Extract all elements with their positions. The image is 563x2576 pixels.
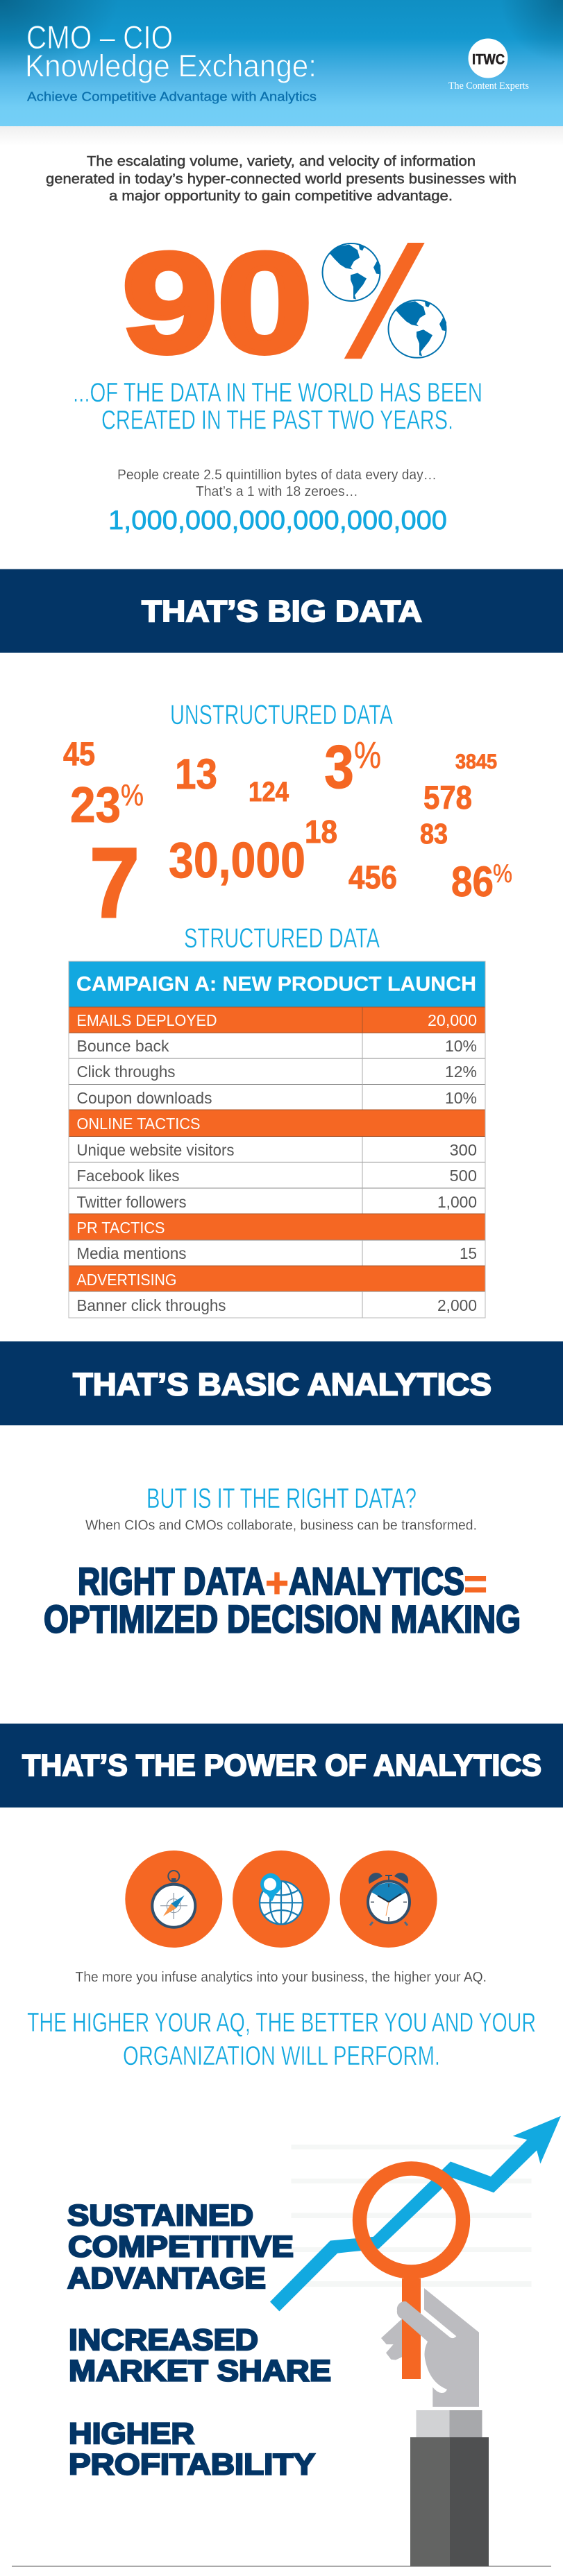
icon: compass: [125, 1851, 222, 1948]
scattered numbers: %: [493, 859, 512, 888]
row: bounce back: [76, 1037, 477, 1055]
band: that's big data: [0, 569, 563, 653]
equation: [44, 1559, 521, 1641]
intro paragraph: a major opportunity to gain competitive advantage.: [109, 189, 453, 204]
table: campaign A: [69, 961, 485, 1318]
quintillion text: [117, 467, 437, 499]
scattered numbers: 23: [70, 778, 121, 833]
row: unique website visitors: 300: [450, 1141, 477, 1159]
title: Knowledge Exchange:: [25, 49, 317, 83]
benefit: increased market share: INCREASED: [69, 2324, 258, 2357]
scattered numbers: 86: [451, 858, 494, 905]
row: media mentions: [76, 1244, 477, 1262]
plus sign: +: [265, 1560, 289, 1606]
row: bounce back: 10%: [445, 1037, 477, 1055]
benefit: sustained competitive advantage: COMPETITIVE: [68, 2231, 294, 2264]
benefit: higher profitability: HIGHER: [69, 2417, 194, 2450]
row: facebook likes: [76, 1167, 477, 1185]
large number: 1,000,000,000,000,000,000: [108, 506, 447, 535]
equation: RIGHT DATA: [78, 1559, 265, 1603]
row: emails deployed: EMAILS DEPLOYED: [76, 1011, 217, 1029]
stat number: 90: [122, 224, 312, 382]
rising arrow: [270, 2116, 561, 2311]
heading: unstructured data: UNSTRUCTURED DATA: [170, 700, 393, 730]
title: CMO – CIO: [26, 19, 173, 55]
row: click throughs: 12%: [445, 1063, 477, 1081]
band: that's basic analytics: [0, 1341, 563, 1425]
scattered numbers: %: [354, 735, 381, 776]
heading: but is it the right data: BUT IS IT THE RIGHT DATA?: [146, 1482, 417, 1514]
scattered numbers: 578: [423, 779, 472, 816]
row: media mentions: 15: [460, 1244, 477, 1262]
row: banner click throughs: [76, 1296, 477, 1314]
row: facebook likes: Facebook likes: [76, 1167, 179, 1185]
subtitle: Achieve Competitive Advantage with Analytics: [27, 89, 317, 104]
scattered numbers: 13: [175, 750, 217, 798]
row: online tactics: ONLINE TACTICS: [76, 1115, 200, 1133]
row: unique website visitors: Unique website visitors: [76, 1141, 235, 1159]
scattered numbers: 456: [348, 859, 397, 895]
benefit: higher profitability: [69, 2417, 315, 2482]
magnifier: [360, 2168, 463, 2379]
benefit: sustained competitive advantage: SUSTAINED: [67, 2199, 253, 2232]
table title: CAMPAIGN A: NEW PRODUCT LAUNCH: [76, 972, 476, 996]
row: coupon downloads: Coupon downloads: [76, 1089, 212, 1107]
row: unique website visitors: [76, 1141, 477, 1159]
AQ headline: [27, 2008, 536, 2071]
shirt cuff: [417, 2410, 482, 2437]
row: bounce back: Bounce back: [76, 1037, 169, 1055]
row: banner click throughs: Banner click throughs: [76, 1296, 226, 1314]
scattered numbers: 3845: [455, 750, 497, 773]
icon: globe with pin: [233, 1851, 330, 1948]
ground line: [12, 2566, 551, 2567]
intro paragraph: The escalating volume, variety, and velocity of information: [87, 154, 476, 169]
stat caption: CREATED IN THE PAST TWO YEARS.: [101, 405, 453, 436]
band: that's the power of analytics: THAT’S THE POWER OF ANALYTICS: [22, 1749, 541, 1783]
row: twitter followers: [76, 1193, 477, 1211]
row: twitter followers: Twitter followers: [76, 1193, 186, 1211]
logo: ITWC: ITWC: [472, 51, 505, 67]
percent slash: [344, 243, 425, 359]
scattered numbers: 30,000: [169, 833, 305, 888]
benefit: sustained competitive advantage: [67, 2199, 294, 2295]
intro paragraph: generated in today’s hyper-connected world presents businesses with: [46, 171, 516, 187]
row: click throughs: [76, 1063, 477, 1081]
quintillion text: That’s a 1 with 18 zeroes…: [196, 484, 358, 499]
row: facebook likes: 500: [450, 1167, 477, 1185]
scattered numbers: 18: [305, 814, 337, 850]
icon: upper globe: [322, 243, 380, 301]
equation: ANALYTICS: [289, 1559, 464, 1603]
scattered numbers: 45: [63, 735, 95, 772]
chart grid bars: [292, 2145, 532, 2287]
row: emails deployed: 20,000: [428, 1011, 477, 1029]
benefit: increased market share: [69, 2324, 331, 2387]
stat caption: [73, 378, 482, 436]
heading: structured data: STRUCTURED DATA: [184, 923, 380, 954]
icon: lower globe: [389, 300, 446, 358]
logo: ITWC: The Content Experts: [448, 80, 529, 92]
band: that's the power of analytics: [0, 1724, 563, 1808]
table title: [69, 961, 485, 1007]
illustration: hand holding magnifier: [12, 2168, 551, 2567]
scattered numbers: 124: [249, 777, 289, 807]
row fills: [69, 1007, 485, 1291]
benefit: sustained competitive advantage: ADVANTAGE: [67, 2262, 266, 2295]
row: coupon downloads: 10%: [445, 1089, 477, 1107]
sleeve: [410, 2437, 489, 2566]
row: banner click throughs: 2,000: [437, 1296, 477, 1314]
AQ text: The more you infuse analytics into your business, the higher your AQ.: [75, 1970, 487, 1985]
band: that's big data: THAT’S BIG DATA: [142, 594, 422, 628]
row: PR tactics: PR TACTICS: [76, 1219, 165, 1237]
row: twitter followers: 1,000: [437, 1193, 477, 1211]
scattered numbers: 83: [420, 818, 448, 850]
hand: [397, 2288, 479, 2407]
title: [25, 19, 317, 83]
scattered numbers: %: [121, 778, 144, 812]
benefit: increased market share: MARKET SHARE: [69, 2354, 331, 2387]
AQ headline: ORGANIZATION WILL PERFORM.: [123, 2041, 440, 2071]
scattered numbers: [63, 732, 512, 938]
header banner: [0, 0, 563, 146]
row: emails deployed: [76, 1011, 477, 1029]
equals sign: =: [464, 1561, 487, 1607]
fingers behind handle: [381, 2319, 402, 2360]
band: that's basic analytics: THAT’S BASIC ANALYTICS: [73, 1366, 491, 1402]
intro paragraph: [46, 154, 516, 204]
scattered numbers: 7: [90, 828, 140, 938]
icon: alarm clock: [340, 1851, 437, 1948]
row: advertising: ADVERTISING: [76, 1271, 176, 1289]
big stat: 90%: [122, 224, 446, 382]
quintillion text: People create 2.5 quintillion bytes of data every day…: [117, 467, 437, 483]
benefit: higher profitability: PROFITABILITY: [69, 2448, 315, 2482]
collaboration text: When CIOs and CMOs collaborate, business can be transformed.: [85, 1518, 477, 1533]
row: media mentions: Media mentions: [76, 1244, 186, 1262]
row: coupon downloads: [76, 1089, 477, 1107]
scattered numbers: 3: [324, 732, 354, 801]
logo: ITWC: [448, 39, 529, 92]
row: click throughs: Click throughs: [76, 1063, 175, 1081]
